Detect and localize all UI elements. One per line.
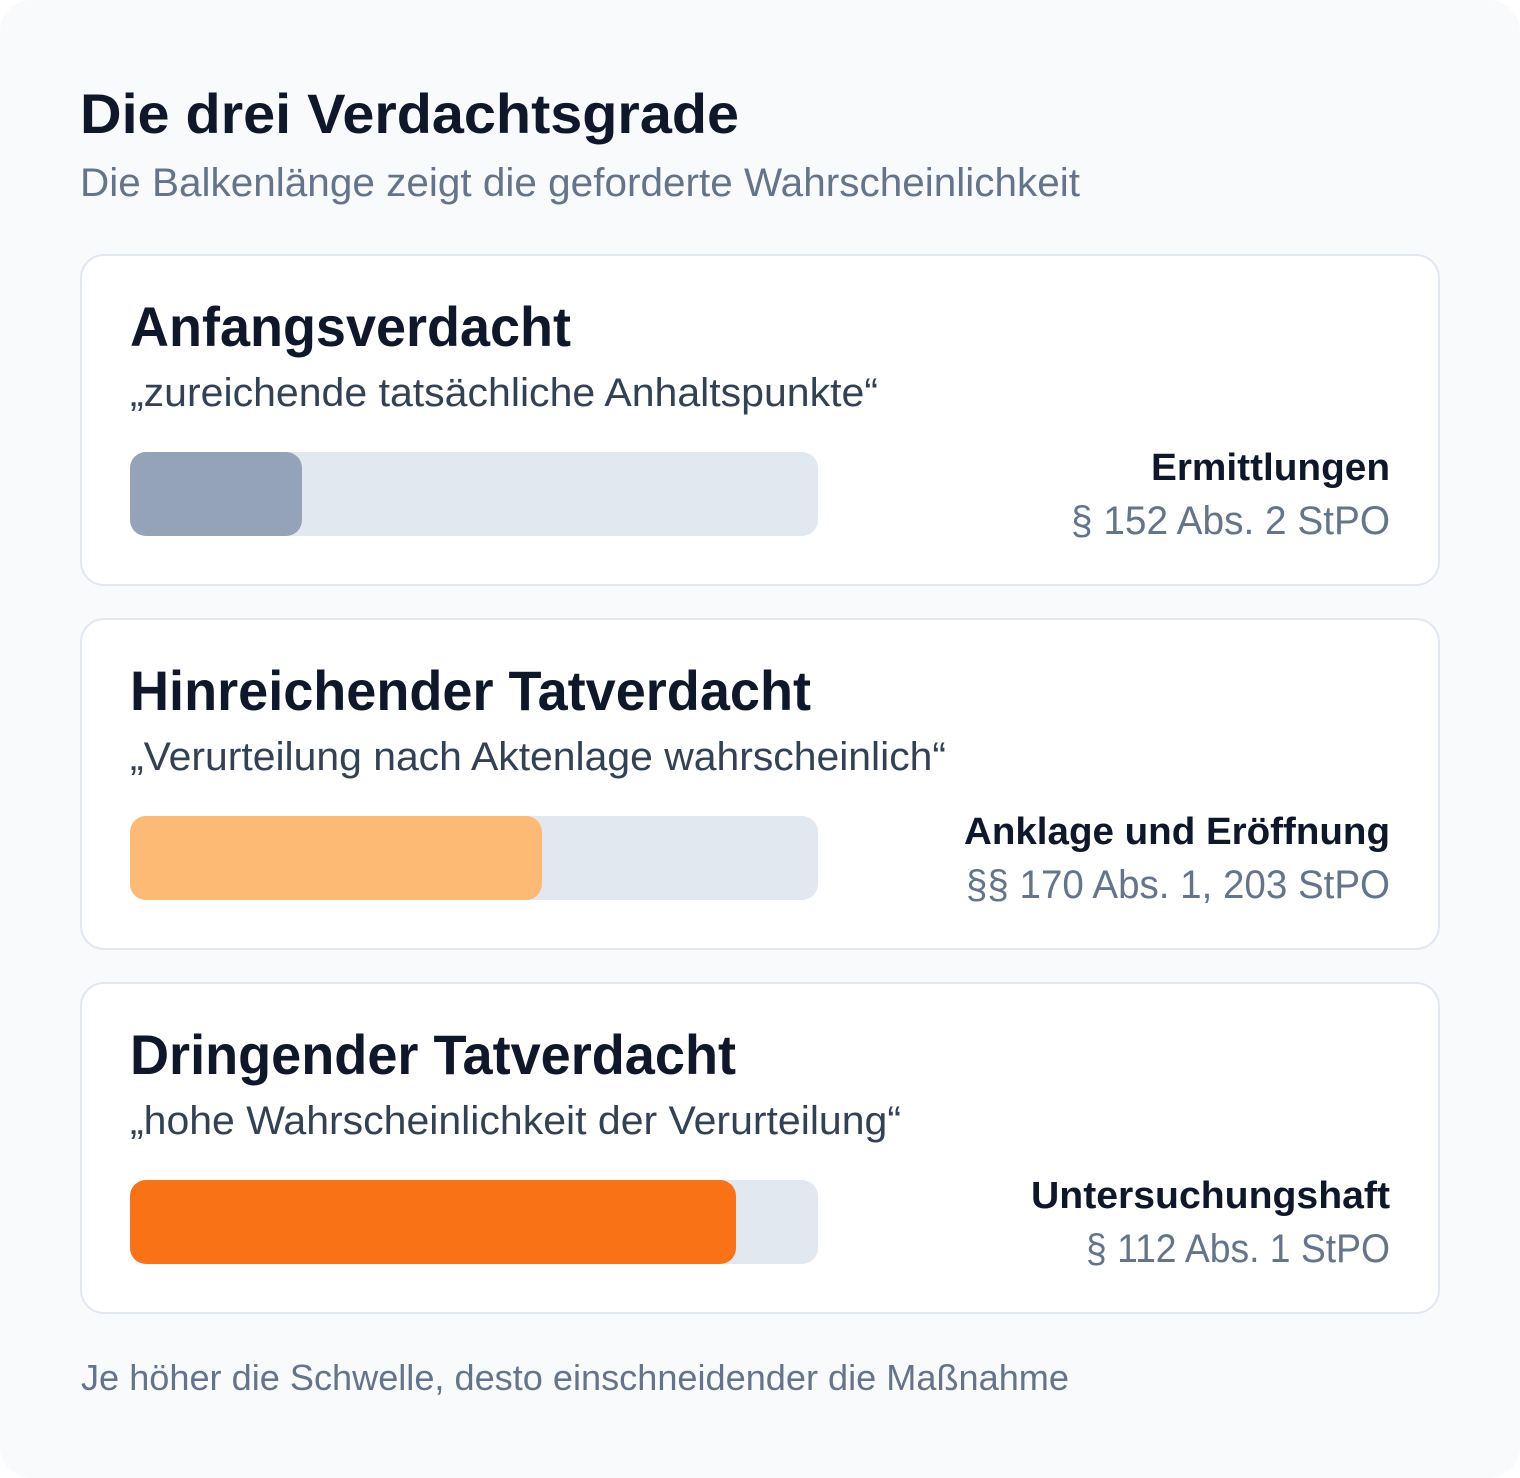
subtitle: Die Balkenlänge zeigt die geforderte Wahrscheinlichkeit	[80, 161, 1080, 205]
statute reference: § 152 Abs. 2 StPO	[1071, 499, 1390, 543]
panel: Dringender Tatverdacht	[81, 983, 1439, 1313]
bar track	[130, 816, 818, 900]
measure label: Anklage und Eröffnung	[964, 811, 1390, 853]
panel: Anfangsverdacht	[81, 255, 1439, 585]
bar fill	[130, 452, 302, 536]
measure label: Ermittlungen	[1151, 447, 1390, 489]
card background	[81, 983, 1439, 1313]
panel: Hinreichender Tatverdacht	[81, 619, 1439, 949]
quote: „Verurteilung nach Aktenlage wahrscheinlich“	[130, 735, 946, 779]
card heading: Dringender Tatverdacht	[130, 1023, 736, 1086]
card heading: Hinreichender Tatverdacht	[130, 659, 811, 722]
bar fill	[130, 1180, 736, 1264]
card heading: Anfangsverdacht	[130, 295, 571, 358]
footer note: Je höher die Schwelle, desto einschneidender die Maßnahme	[81, 1357, 1069, 1398]
bar track	[130, 452, 818, 536]
statute reference: §§ 170 Abs. 1, 203 StPO	[966, 863, 1390, 907]
bar fill	[130, 816, 542, 900]
measure label: Untersuchungshaft	[1031, 1175, 1390, 1217]
quote: „hohe Wahrscheinlichkeit der Verurteilung“	[130, 1099, 901, 1143]
bar track	[130, 1180, 818, 1264]
card background	[81, 619, 1439, 949]
card background	[81, 255, 1439, 585]
title: Die drei Verdachtsgrade	[80, 82, 739, 145]
statute reference: § 112 Abs. 1 StPO	[1086, 1227, 1390, 1271]
quote: „zureichende tatsächliche Anhaltspunkte“	[130, 371, 878, 415]
